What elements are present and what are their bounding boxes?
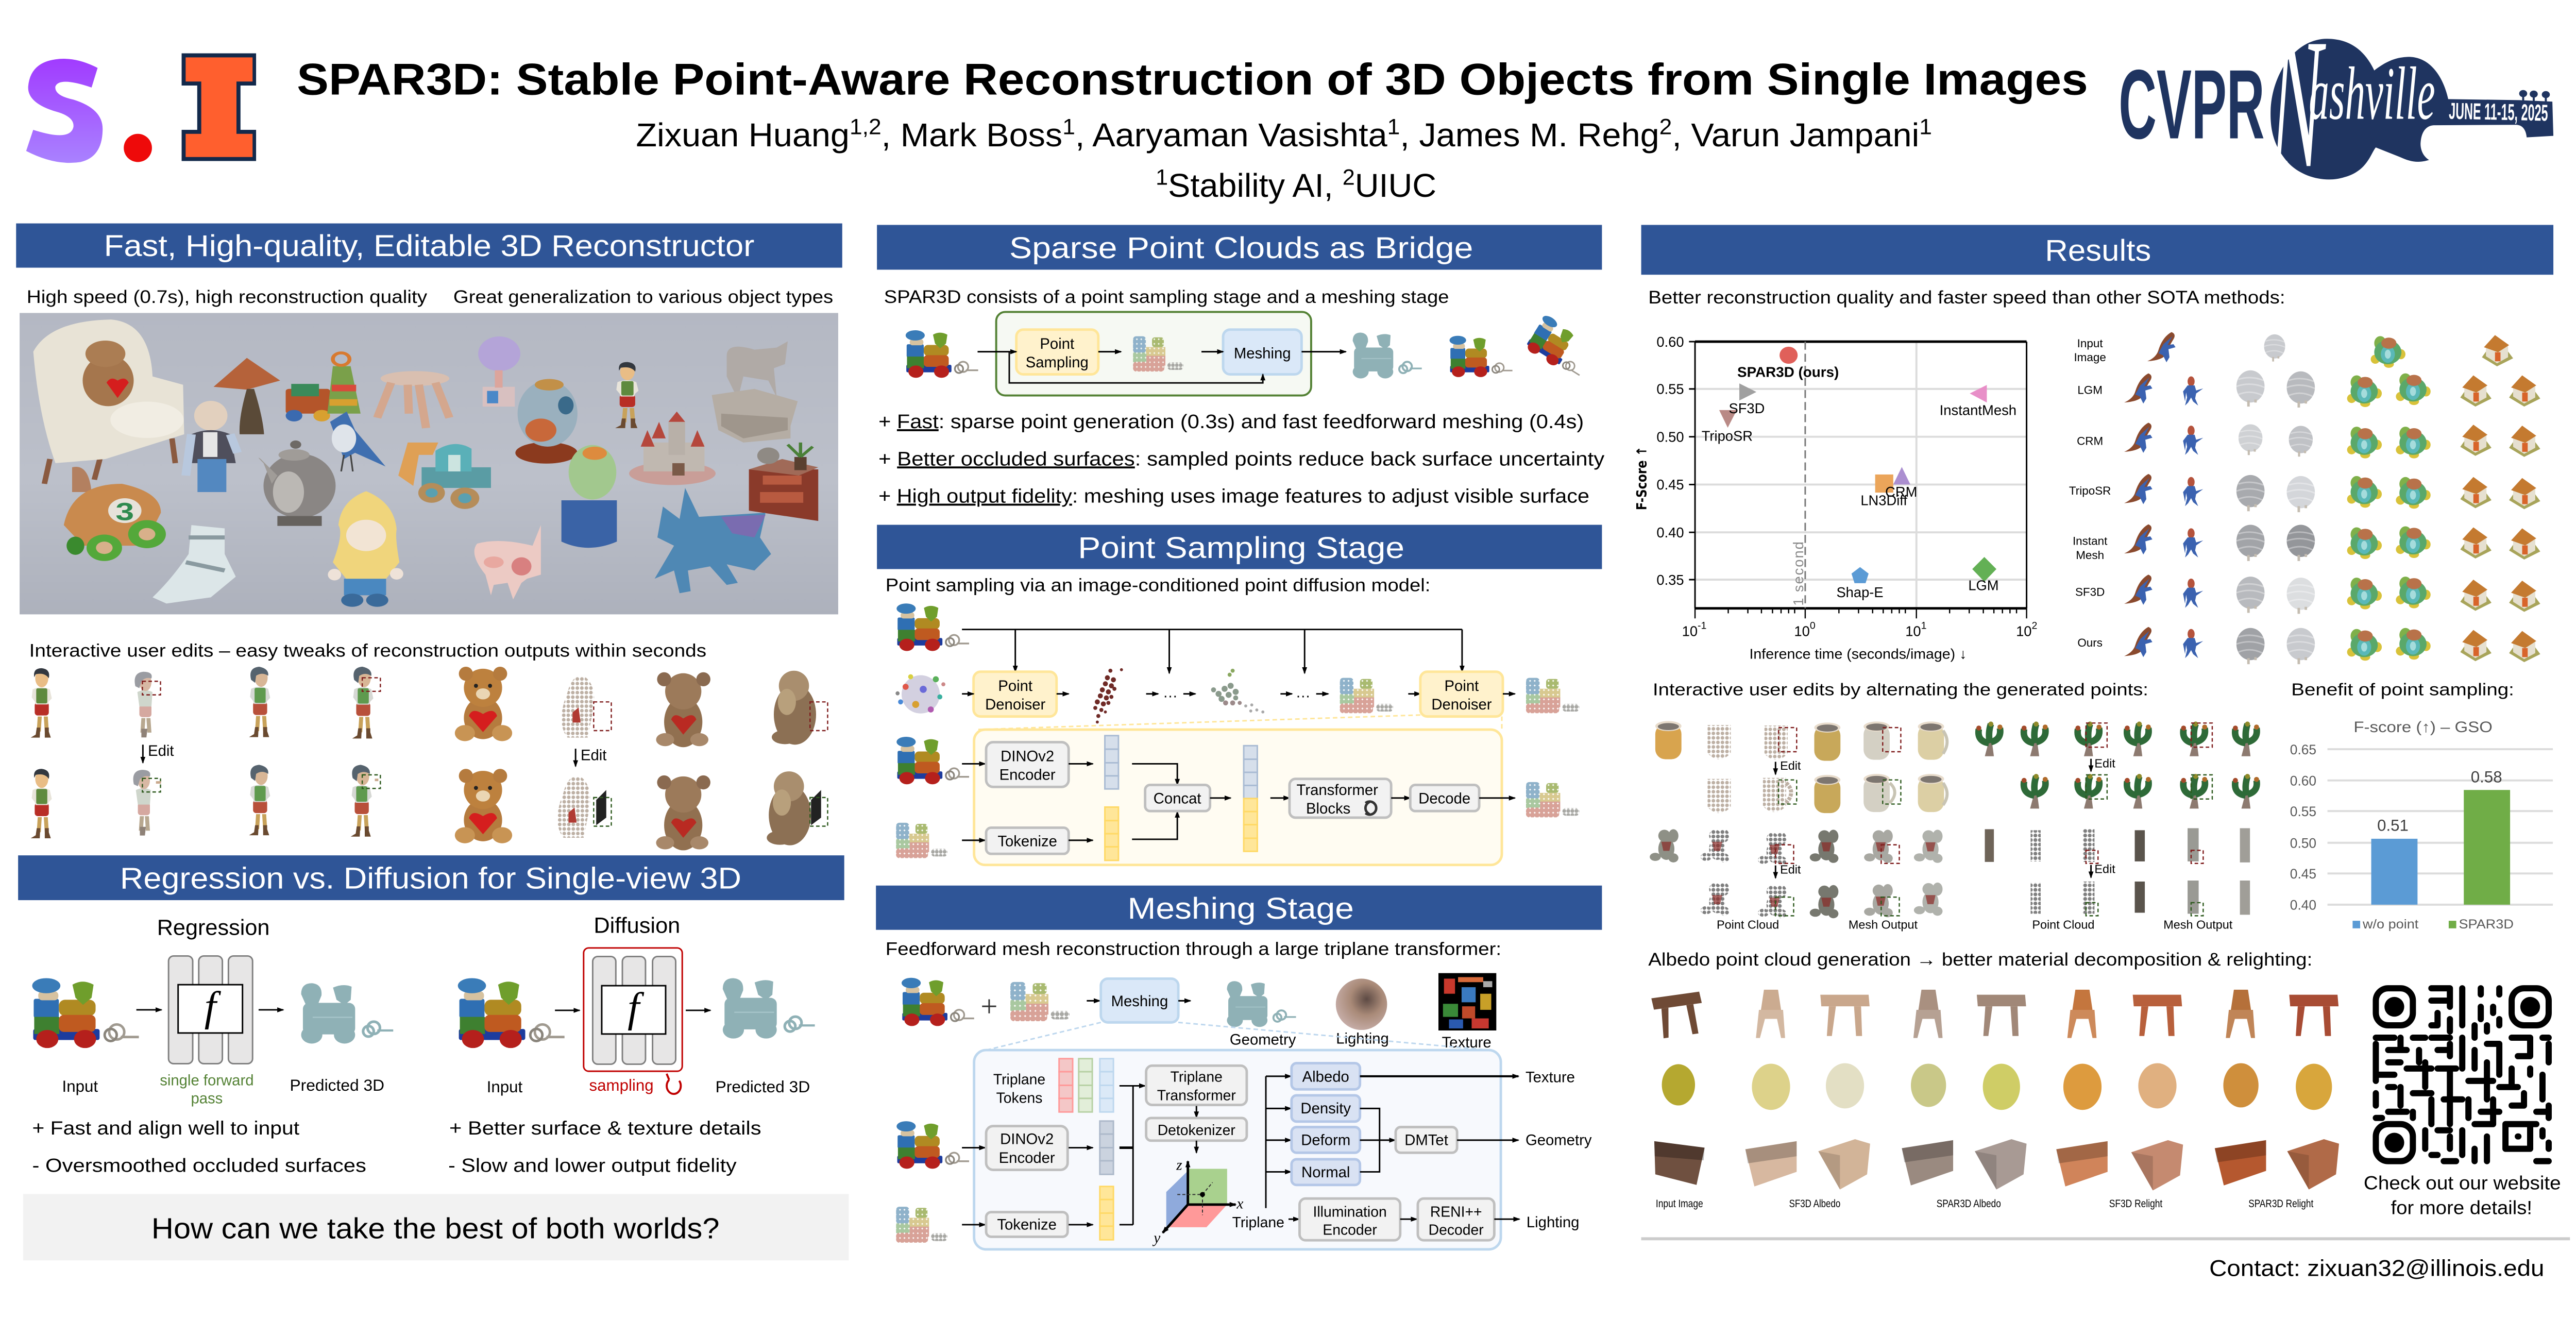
denoiser detail panel: Transformer [1297,782,1378,799]
affiliations: 1 [1156,165,1168,190]
title: SPAR3D: Stable Point-Aware Reconstruction of 3D Objects from Single Images [297,55,2088,105]
scatter chart: F-score vs inference time: 0.40 [1656,525,1684,540]
meshing overview row: Meshing [1111,993,1168,1010]
interactive user edits caption: Interactive user edits – easy tweaks of reconstruction outputs within seconds [29,640,706,661]
albedo and relighting gallery: SPAR3D Albedo [1937,1197,2001,1210]
scatter chart: F-score vs inference time: LGM [1968,578,1999,594]
bar chart: F-score GSO: 0.58 [2471,768,2502,786]
diffusion diagram: Diffusion [594,914,680,938]
authors: 1 [1387,115,1400,140]
regression diagram [32,915,393,1176]
comparison gallery: Mesh [2076,549,2104,562]
website caption [2364,1172,2561,1218]
regression diagram: Regression [157,915,269,940]
contact line: Contact: zixuan32@illinois.edu [2209,1255,2544,1281]
heading [1641,225,2553,275]
denoiser detail panel: Blocks [1306,800,1350,817]
bar chart: F-score GSO: 0.65 [2290,742,2316,757]
meshing detail panel: Deform [1301,1132,1350,1149]
callout: best of both worlds [23,1194,849,1260]
logo: Stability AI S. [26,59,152,163]
comparison gallery: TripoSR [2069,484,2111,497]
heading: Sparse Point Clouds as Bridge [1009,231,1473,265]
heading: Meshing Stage [1127,892,1354,925]
denoiser detail panel: Concat [1154,790,1201,807]
comparison gallery: SF3D [2075,585,2105,598]
meshing detail panel: Encoder [1323,1222,1377,1238]
diffusion diagram: sampling [589,1076,654,1094]
scatter chart: F-score vs inference time: LN3Diff [1860,492,1907,508]
denoising chain diagram [895,603,1579,730]
panel: results [1634,225,2561,1218]
authors: 1 [1062,115,1075,140]
bar chart: F-score GSO: 0.40 [2290,898,2316,913]
3D objects scene [20,313,838,614]
meshing detail panel: Detokenizer [1158,1122,1235,1139]
regression diagram: Input [62,1077,98,1095]
diffusion diagram: Predicted 3D [716,1078,810,1096]
scatter chart: F-score vs inference time: 10 [2016,623,2031,639]
meshing detail panel: RENI++ [1430,1204,1482,1220]
heading [18,855,844,900]
subheading right: Great generalization to various object types [453,287,833,307]
pipeline diagram: Meshing [1234,345,1291,362]
edit gallery: mugs, cacti, plush, logs: Edit [2094,862,2115,875]
bar chart: F-score GSO: 0.45 [2290,866,2316,882]
meshing detail panel: Density [1300,1100,1351,1117]
comparison gallery: Ours [2077,636,2103,649]
scatter chart: F-score vs inference time: 1 second [1790,540,1806,606]
edit gallery: mugs, cacti, plush, logs: Mesh Output [1849,918,1918,932]
regression diagram: pass [191,1090,223,1107]
edit gallery: mugs, cacti, plush, logs: Edit [1780,759,1801,772]
denoiser detail panel [896,730,1579,865]
subheading left: High speed (0.7s), high reconstruction quality [27,287,428,307]
bar chart: F-score GSO: 0.55 [2290,804,2316,819]
denoising chain diagram: Point [1445,678,1479,695]
heading: Regression vs. Diffusion for Single-view 3D [120,862,741,895]
panel: fast high-quality editable reconstructor [16,224,842,850]
scatter chart: F-score vs inference time: 10 [1794,623,1810,639]
meshing detail panel: Triplane [993,1071,1045,1088]
scatter chart: F-score vs inference time [1634,334,2037,662]
meshing detail panel: Lighting [1527,1214,1579,1231]
bar chart: F-score GSO: w/o point [2362,917,2418,932]
edit example: character [31,667,380,838]
albedo and relighting gallery: SPAR3D Relight [2248,1197,2313,1210]
scatter chart: F-score vs inference time: 0.60 [1656,334,1684,350]
regression diagram: single forward [160,1072,254,1089]
website caption: for more details! [2391,1196,2532,1218]
results intro: Better reconstruction quality and faster speed than other SOTA methods: [1648,288,2285,308]
authors: Zixuan Huang [636,116,843,154]
scatter chart: F-score vs inference time: 0.35 [1656,572,1684,588]
bar chart: F-score GSO: 0.60 [2290,773,2316,788]
logo: CVPR Nashville guitar: ashville [2309,51,2435,135]
meshing overview row: Lighting [1336,1030,1389,1047]
scatter chart: F-score vs inference time: Inference time (seconds/image) ↓ [1750,646,1967,662]
scatter chart: F-score vs inference time: -1 [1698,620,1706,632]
scatter chart: F-score vs inference time: 0.50 [1656,429,1684,445]
comparison gallery: CRM [2077,434,2103,447]
comparison gallery: Input [2077,337,2103,350]
affiliations: 2 [1343,165,1355,190]
pipeline diagram [906,312,1598,396]
heading [876,886,1602,930]
denoising chain diagram: … [1296,684,1311,701]
meshing detail panel: Tokenize [997,1216,1057,1233]
scatter chart: F-score vs inference time: 0 [1810,620,1816,632]
panel: point sampling stage [877,525,1602,865]
edit gallery: mugs, cacti, plush, logs: Point Cloud [1717,918,1779,932]
intro text: Point sampling via an image-conditioned point diffusion model: [886,575,1430,595]
logo: CVPR Nashville guitar: CVPR [2119,49,2265,160]
edit example: character: Edit [148,742,174,759]
authors: 1,2 [850,115,882,140]
comparison gallery: LGM [2077,384,2103,397]
albedo caption: Albedo point cloud generation → better material decomposition & relighting: [1648,950,2312,970]
meshing detail panel: y [1152,1230,1161,1246]
edit gallery: mugs, cacti, plush, logs: Edit [1780,863,1801,876]
diffusion diagram: - Slow and lower output fidelity [448,1154,737,1176]
3D objects scene: 3 [115,498,134,526]
regression diagram: - Oversmoothed occluded surfaces [32,1154,366,1176]
authors: 1 [1919,115,1932,140]
logo: CVPR Nashville guitar: N [2269,1,2327,207]
meshing detail panel: z [1176,1157,1182,1174]
meshing detail panel: x [1236,1196,1243,1212]
comparison gallery [2069,332,2540,664]
denoiser detail panel: Tokenize [997,833,1057,850]
heading [877,525,1602,569]
heading: Point Sampling Stage [1078,531,1404,565]
meshing detail panel: Albedo [1302,1069,1349,1086]
heading [16,224,842,268]
meshing detail panel: DINOv2 [1000,1131,1054,1148]
benefit bullets: + Fast: sparse point generation (0.3s) and fast feedforward meshing (0.4s) [878,411,1584,433]
meshing detail panel: Tokens [996,1090,1042,1107]
meshing detail panel: Encoder [999,1149,1055,1166]
heading: Fast, High-quality, Editable 3D Reconstructor [104,229,754,263]
diffusion diagram [448,914,815,1176]
meshing overview row [902,973,1496,1051]
meshing detail panel: Decoder [1429,1222,1484,1238]
benefit bullets: + High output fidelity : meshing uses image features to adjust visible surface [878,486,1589,508]
meshing detail panel: Normal [1301,1164,1350,1181]
authors: , Aaryaman Vasishta [1075,116,1387,154]
denoising chain diagram: Point [998,678,1032,695]
diffusion diagram: + Better surface & texture details [449,1117,761,1139]
regression diagram: f [205,983,222,1029]
bar chart: F-score GSO [2290,719,2553,932]
panel: regression vs diffusion [18,855,849,1260]
albedo and relighting gallery: Input Image [1656,1197,1703,1210]
edit example: teddy bear [455,667,827,850]
meshing detail panel: Texture [1526,1069,1575,1086]
denoiser detail panel: Decode [1418,790,1470,807]
interactive edit caption: Interactive user edits by alternating the generated points: [1653,681,2148,700]
authors: , Mark Boss [882,116,1062,154]
affiliations: Stability AI, [1168,167,1343,204]
pipeline diagram: Point [1040,335,1074,352]
website caption: Check out our website [2364,1172,2561,1194]
meshing overview row: Geometry [1230,1031,1296,1048]
meshing detail panel: Transformer [1157,1088,1236,1104]
meshing detail panel: Triplane [1171,1069,1223,1086]
denoiser detail panel: DINOv2 [1001,748,1054,765]
meshing detail panel: Triplane [1232,1214,1284,1231]
scatter chart: F-score vs inference time: 10 [1682,623,1698,639]
scatter chart: F-score vs inference time: CRM [1885,484,1917,500]
scatter chart: F-score vs inference time: F-Score ↑ [1634,446,1650,510]
authors: 2 [1659,115,1672,140]
comparison gallery: Instant [2073,535,2108,548]
panel: meshing stage [876,886,1602,1249]
meshing detail panel: Illumination [1313,1204,1387,1220]
edit gallery: mugs, cacti, plush, logs: Edit [2094,756,2115,770]
scatter chart: F-score vs inference time: TripoSR [1702,428,1753,444]
denoiser detail panel: Encoder [999,767,1056,784]
meshing overview row: Texture [1442,1034,1492,1051]
panel: sparse point clouds as bridge [877,225,1604,508]
bar chart: F-score GSO: 0.51 [2377,816,2409,834]
albedo and relighting gallery: SF3D Relight [2109,1197,2162,1210]
benefit bullets [878,411,1604,508]
diffusion diagram: Input [487,1078,523,1096]
scatter chart: F-score vs inference time: SF3D [1728,400,1765,416]
benefit caption: Benefit of point sampling: [2291,681,2514,700]
edit example: teddy bear: Edit [581,747,606,764]
footer rule [1641,1237,2570,1240]
meshing detail panel: DMTet [1404,1132,1448,1149]
albedo and relighting gallery: SF3D Albedo [1789,1197,1840,1210]
bar chart: F-score GSO: F-score (↑) – GSO [2353,719,2493,736]
callout: best of both worlds: How can we take the best of both worlds? [151,1212,719,1245]
edit gallery: mugs, cacti, plush, logs [1650,721,2259,932]
scatter chart: F-score vs inference time: 1 [1921,620,1927,632]
authors: , Varun Jampani [1672,116,1919,154]
logo: CVPR Nashville guitar [2119,1,2553,207]
edit gallery: mugs, cacti, plush, logs: Mesh Output [2163,918,2233,932]
benefit bullets: + Better occluded surfaces : sampled points reduce back surface uncertainty [878,448,1604,470]
denoising chain diagram: … [1163,684,1178,701]
scatter chart: F-score vs inference time: Shap-E [1836,584,1884,600]
affiliations: UIUC [1355,167,1436,204]
denoising chain diagram: Denoiser [985,696,1046,713]
top header band [26,1,2553,207]
scatter chart: F-score vs inference time: 10 [1905,623,1921,639]
albedo and relighting gallery [1651,990,2339,1210]
comparison gallery: Image [2074,351,2106,364]
heading: Results [2045,234,2151,267]
meshing detail panel: Geometry [1526,1132,1592,1149]
denoising chain diagram: Denoiser [1431,696,1492,713]
scatter chart: F-score vs inference time: 2 [2031,620,2037,632]
bar chart: F-score GSO: 0.50 [2290,836,2316,851]
regression diagram: + Fast and align well to input [32,1117,300,1139]
intro text: SPAR3D consists of a point sampling stage and a meshing stage [884,287,1449,307]
edit gallery: mugs, cacti, plush, logs: Point Cloud [2032,918,2094,932]
scatter chart: F-score vs inference time: SPAR3D (ours) [1737,364,1839,380]
intro text: Feedforward mesh reconstruction through a large triplane transformer: [886,939,1501,959]
regression diagram: Predicted 3D [290,1076,384,1094]
meshing detail panel [896,1050,1592,1249]
bar chart: F-score GSO: SPAR3D [2459,917,2514,932]
authors: , James M. Rehg [1400,116,1659,154]
diffusion diagram: f [628,984,645,1030]
scatter chart: F-score vs inference time: 0.45 [1656,477,1684,493]
pipeline diagram: Sampling [1026,354,1089,371]
scatter chart: F-score vs inference time: InstantMesh [1940,402,2016,418]
heading [877,225,1602,269]
logo: Illinois block I [182,54,256,161]
scatter chart: F-score vs inference time: 0.55 [1656,381,1684,397]
QR code [2376,988,2549,1161]
